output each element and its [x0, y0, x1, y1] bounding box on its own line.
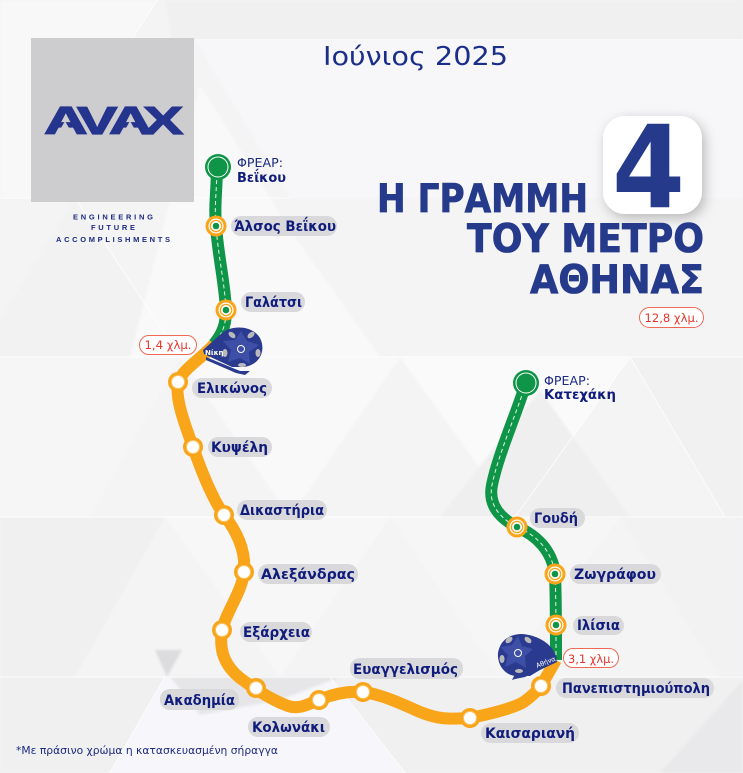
station label: Δικαστήρια: Δικαστήρια	[240, 503, 324, 519]
shaft: Κατεχάκη	[513, 370, 616, 403]
title: ΑΘΗΝΑΣ	[530, 257, 704, 303]
station label: Κυψέλη: Κυψέλη	[211, 440, 268, 456]
shaft: Κατεχάκη: Κατεχάκη	[544, 387, 616, 403]
station label: Κολωνάκι: Κολωνάκι	[252, 720, 325, 736]
stations on orange section	[168, 372, 551, 728]
title: Η ΓΡΑΜΜΗ	[377, 176, 588, 222]
station label: Ευαγγελισμός: Ευαγγελισμός	[353, 662, 458, 678]
total length badge	[640, 308, 704, 328]
logo: AVAX	[31, 38, 194, 202]
footnote: *Με πράσινο χρώμα η κατασκευασμένη σήραγγα	[16, 744, 278, 757]
shaft: Βεΐκου: ΦΡΕΑΡ:	[237, 156, 283, 170]
station label: Άλσος Βεΐκου: Άλσος Βεΐκου	[234, 217, 336, 235]
date heading: Ιούνιος 2025	[323, 42, 508, 72]
shaft: Βεΐκου	[205, 154, 286, 186]
route line: green east section	[491, 383, 556, 660]
section length: 3,1 km: 3,1 χλμ.	[568, 652, 614, 666]
section length: 1,4 km	[140, 336, 196, 354]
TBM Αθήνα	[498, 634, 557, 680]
line 4 badge: 4	[612, 101, 685, 234]
logo tagline: ENGINEERING	[73, 212, 153, 222]
title	[377, 176, 704, 303]
station label: Ακαδημία: Ακαδημία	[164, 693, 235, 709]
total length badge: 12,8 χλμ.	[644, 311, 698, 325]
TBM Αθήνα: Αθήνα	[535, 655, 557, 670]
TBM Νίκη: Νίκη	[205, 349, 224, 357]
shaft: Κατεχάκη: ΦΡΕΑΡ:	[544, 374, 590, 388]
logo tagline: FUTURE	[91, 223, 135, 232]
station label: Ιλίσια: Ιλίσια	[577, 618, 620, 634]
stations on green section	[206, 216, 566, 636]
route line: orange section	[177, 342, 556, 719]
station label: Πανεπιστημιούπολη: Πανεπιστημιούπολη	[562, 681, 710, 697]
logo tagline	[56, 212, 170, 244]
station label: Καισαριανή: Καισαριανή	[485, 726, 575, 742]
station label: Αλεξάνδρας: Αλεξάνδρας	[261, 567, 355, 583]
shaft: Βεΐκου: Βεΐκου	[237, 168, 286, 186]
title: ΤΟΥ ΜΕΤΡΟ	[467, 216, 704, 262]
station label: Γαλάτσι: Γαλάτσι	[245, 295, 302, 311]
station label: Εξάρχεια: Εξάρχεια	[243, 625, 310, 641]
station label: Ελικώνος: Ελικώνος	[197, 381, 267, 397]
route line: green west section	[214, 166, 226, 344]
station label: Ζωγράφου: Ζωγράφου	[574, 567, 656, 583]
TBM Νίκη	[203, 328, 262, 375]
station label: Γουδή: Γουδή	[534, 511, 578, 527]
logo tagline: ACCOMPLISHMENTS	[56, 235, 170, 244]
section length: 1,4 km: 1,4 χλμ.	[144, 338, 192, 352]
section length: 3,1 km	[564, 648, 618, 668]
logo: AVAX: AVAX	[44, 99, 183, 142]
